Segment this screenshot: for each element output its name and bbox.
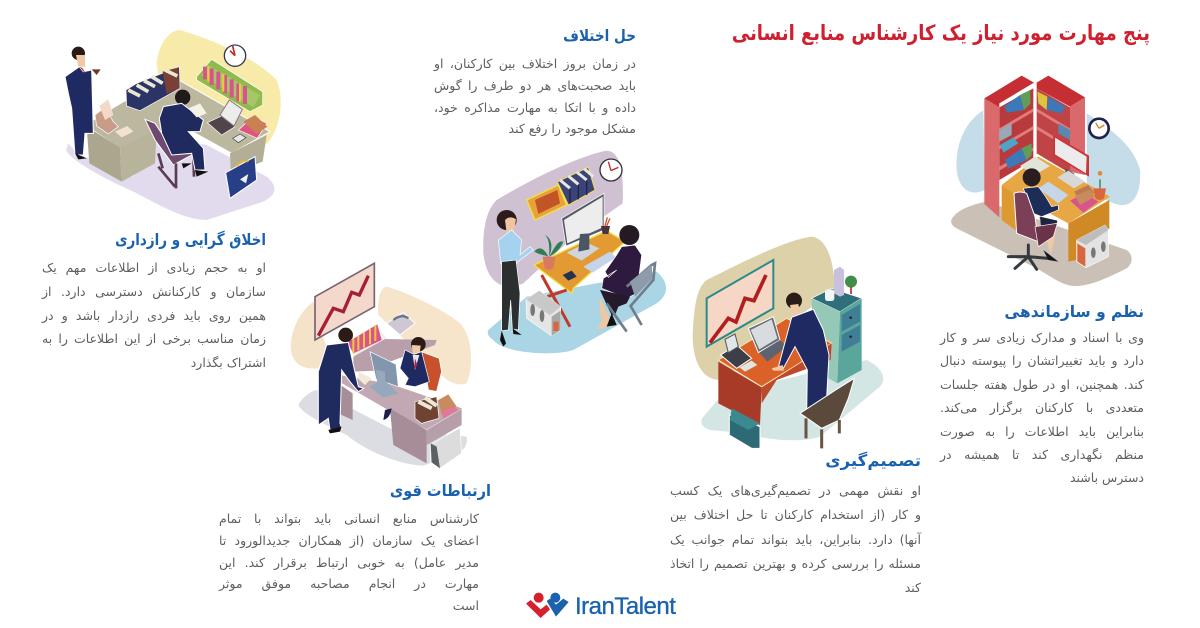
- text block: مدیر عامل) به خوبی ارتباط برقرار کند. این: [219, 555, 479, 570]
- text block: وی با اسناد و مدارک زیادی سر و کار: [940, 330, 1144, 345]
- text block: داده و با اتکا به مهارت مذاکره خود،: [434, 100, 636, 115]
- title: پنج مهارت مورد نیاز یک کارشناس منابع انسانی: [732, 21, 1150, 45]
- text block: مسئله را بررسی کرده و بهترین تصمیم را اتخاذ: [670, 556, 921, 571]
- logo: IranTalent: [526, 592, 676, 620]
- text block: دارد و باید تغییراتشان را پیوسته دنبال: [940, 353, 1144, 368]
- illustration: two men at olive L-shaped desk: [66, 30, 281, 220]
- panel: نظم و سازماندهی: [940, 76, 1144, 485]
- logo wordmark: IranTalent: [575, 593, 675, 620]
- text block: [670, 483, 922, 595]
- panel: حل اختلاف: [434, 26, 666, 354]
- text block: زمان مناسب برخی از این اطلاعات را به: [42, 331, 266, 346]
- heading: حل اختلاف: [563, 26, 636, 45]
- text block: مشکل موجود را رفع کند: [509, 121, 636, 136]
- text block: متعددی با کارکنان برگزار می‌کند.: [940, 400, 1144, 415]
- panel: تصمیم‌گیری: [670, 236, 922, 595]
- heading: نظم و سازماندهی: [1004, 302, 1144, 321]
- text block: کند. همچنین، او در طول هفته جلسات: [940, 377, 1144, 392]
- text block: اشتراک بگذارد: [191, 355, 266, 370]
- heading: اخلاق گرایی و رازداری: [115, 230, 266, 249]
- text block: سازمان و کارکنانش دسترسی دارد. از: [42, 284, 266, 299]
- text block: منظم نگهداری کند تا همیشه در: [940, 447, 1144, 462]
- text block: اعضای یک سازمان (از همکاران جدیدالورود تا: [219, 533, 479, 548]
- text block: است: [453, 598, 479, 613]
- text block: دسترس باشند: [1070, 470, 1144, 485]
- text block: کند: [905, 580, 921, 595]
- panel: ارتباطات قوی: [218, 262, 491, 613]
- text block: او نقش مهمی در تصمیم‌گیری‌های یک کسب: [670, 483, 921, 498]
- text block: [434, 56, 636, 136]
- text block: و کار (از استخدام کارکنان تا حل اختلاف بین: [670, 507, 921, 522]
- heading: ارتباطات قوی: [390, 481, 491, 500]
- illustration: man at red desk with chart: [692, 236, 884, 448]
- text block: آنها) دارد. بنابراین، باید بتواند تمام جوانب یک: [670, 532, 921, 547]
- illustration: two women at orange desk: [483, 150, 666, 354]
- text block: باید صحبت‌های هر دو طرف را گوش: [434, 78, 636, 93]
- text block: [42, 260, 266, 370]
- text block: در زمان بروز اختلاف بین کارکنان، او: [434, 56, 636, 71]
- panel: اخلاق گرایی و رازداری: [42, 30, 281, 370]
- text block: مهارت در انجام مصاحبه موفق موثر: [219, 576, 479, 591]
- illustration: two men at mauve desk: [290, 262, 471, 468]
- text block: همین روی باید فردی رازدار باشد و در: [42, 308, 266, 323]
- icon: logo figures: [526, 592, 569, 618]
- illustration: woman at desk with red bookshelf: [951, 76, 1140, 286]
- heading: تصمیم‌گیری: [825, 451, 921, 470]
- text block: او به حجم زیادی از اطلاعات مهم یک: [42, 260, 266, 275]
- text block: بنابراین باید اطلاعات را به صورت: [940, 424, 1144, 439]
- text block: کارشناس منابع انسانی باید بتواند با تمام: [219, 511, 479, 526]
- text block: [218, 511, 479, 613]
- text block: [940, 330, 1144, 485]
